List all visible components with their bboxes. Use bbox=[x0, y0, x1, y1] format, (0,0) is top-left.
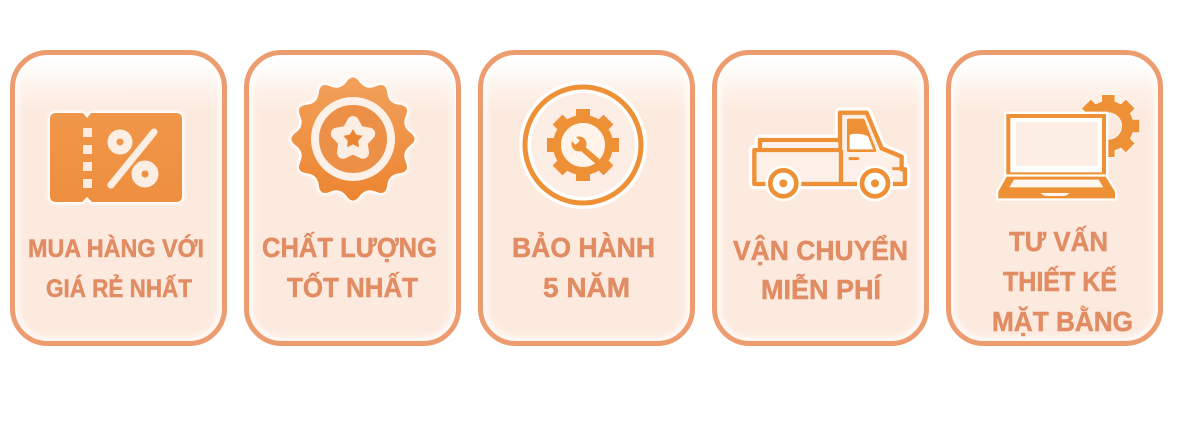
label: tư vấn thiết kế mặt bằng: MẶT BẰNG bbox=[992, 306, 1133, 337]
icon: quality medal bbox=[291, 77, 415, 201]
label: mua hàng với giá rẻ nhất: GIÁ RẺ NHẤT bbox=[46, 273, 192, 303]
icon: discount ticket bbox=[50, 113, 182, 202]
icon: laptop with gear bbox=[998, 95, 1139, 198]
label: vận chuyển miễn phí bbox=[733, 235, 908, 305]
label: tư vấn thiết kế mặt bằng: THIẾT KẾ bbox=[1003, 266, 1117, 297]
icon: pickup truck bbox=[754, 113, 905, 201]
label: vận chuyển miễn phí: VẬN CHUYỂN bbox=[733, 235, 908, 266]
label: bảo hành 5 năm: 5 NĂM bbox=[543, 272, 630, 303]
label: mua hàng với giá rẻ nhất bbox=[28, 233, 204, 303]
label: bảo hành 5 năm bbox=[512, 231, 655, 303]
label: tư vấn thiết kế mặt bằng: TƯ VẤN bbox=[1009, 226, 1108, 257]
label: vận chuyển miễn phí: MIỄN PHÍ bbox=[761, 274, 882, 305]
panel: tư vấn bbox=[948, 52, 1160, 344]
label: chất lượng tốt nhất bbox=[262, 232, 437, 303]
label: chất lượng tốt nhất: TỐT NHẤT bbox=[287, 271, 418, 303]
label: mua hàng với giá rẻ nhất: MUA HÀNG VỚI bbox=[28, 233, 204, 263]
panel: bảo hành bbox=[480, 52, 692, 344]
label: bảo hành 5 năm: BẢO HÀNH bbox=[512, 231, 655, 263]
panel: vận chuyển bbox=[714, 52, 926, 344]
panel: giá rẻ bbox=[12, 52, 224, 344]
label: tư vấn thiết kế mặt bằng bbox=[992, 226, 1133, 337]
panel: chất lượng bbox=[246, 52, 458, 344]
icon: gear and wrench bbox=[519, 81, 647, 209]
label: chất lượng tốt nhất: CHẤT LƯỢNG bbox=[262, 232, 437, 263]
